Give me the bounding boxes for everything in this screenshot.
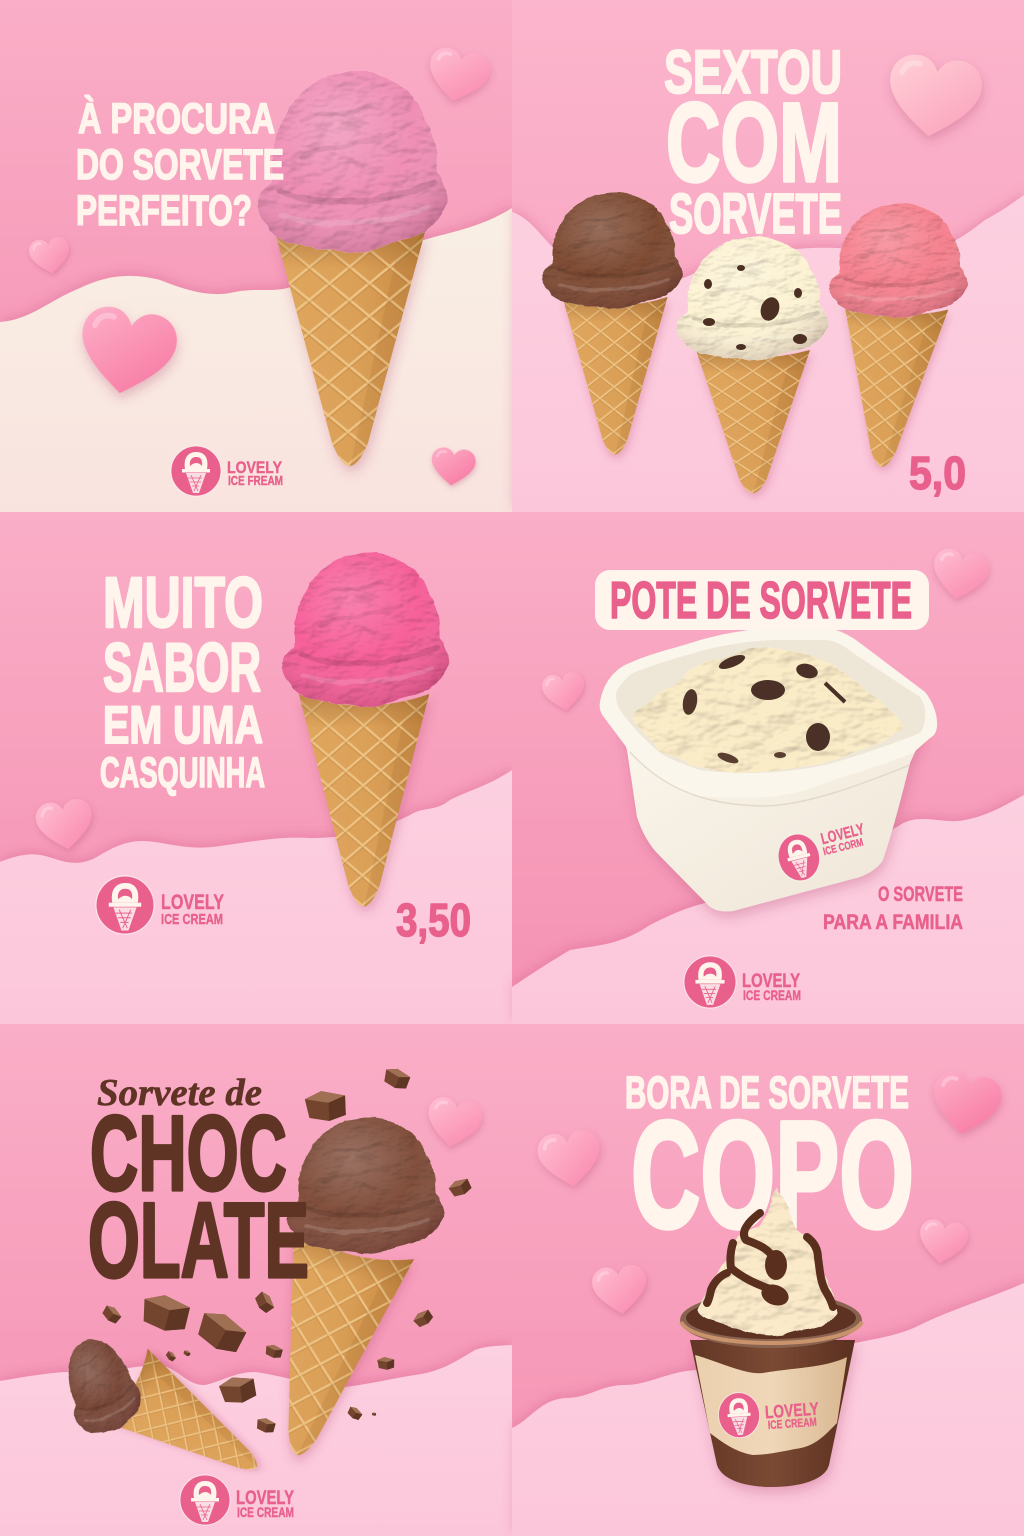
chocolate cone	[542, 192, 682, 455]
headline: DO SORVETE	[76, 141, 284, 189]
logo: ICE FREAM	[228, 473, 283, 488]
panel background	[0, 0, 512, 512]
logo	[171, 446, 283, 496]
logo	[684, 956, 801, 1008]
headline: SEXTOU	[664, 38, 842, 106]
chip vanilla cone	[677, 237, 827, 494]
headline	[625, 1067, 914, 1260]
panel: muito sabor em uma casquinha	[0, 512, 512, 1024]
headline	[88, 1093, 309, 1300]
panel background	[512, 0, 1024, 512]
pink scoop	[282, 552, 448, 707]
panel background	[512, 1024, 1024, 1536]
price: 5,0	[909, 447, 966, 499]
glass rim	[680, 1292, 862, 1348]
headline	[664, 38, 842, 246]
ice cream tub	[600, 628, 937, 912]
cup logo: ICE CREAM	[767, 1415, 817, 1432]
light wave	[0, 1345, 512, 1536]
icon: heart left	[541, 671, 587, 713]
headline: MUITO	[103, 564, 263, 643]
headline: CASQUINHA	[100, 749, 265, 797]
panel: bora de sorvete copo	[512, 1024, 1024, 1536]
headline: COM	[666, 80, 842, 205]
headline: CHOC	[90, 1093, 287, 1213]
tub logo: ICE CORM	[822, 837, 865, 858]
waffle cone	[299, 694, 429, 908]
headline: OLATE	[88, 1180, 309, 1300]
tagline	[823, 883, 963, 934]
icon: heart	[883, 51, 985, 143]
headline: EM UMA	[103, 696, 263, 755]
tub front rim line	[630, 752, 910, 806]
tub logo	[773, 818, 873, 885]
icon: heart left	[28, 236, 72, 276]
chocolate chunks	[100, 1066, 473, 1434]
cup body	[690, 1340, 855, 1487]
icon: heart right	[916, 1218, 970, 1266]
light wave	[0, 770, 512, 1024]
logo	[180, 1475, 294, 1525]
tagline: PARA A FAMILIA	[823, 911, 963, 934]
waffle cone	[275, 232, 425, 467]
chip ice cream scoop	[633, 648, 903, 772]
script title: Sorvete de	[97, 1072, 262, 1114]
icon: heart top right	[927, 1069, 1005, 1139]
panel: sextou com sorvete	[512, 0, 1024, 512]
icon: large heart	[73, 303, 181, 401]
logo: ICE CREAM	[237, 1504, 294, 1520]
icon: heart	[423, 1095, 485, 1151]
tub logo: LOVELY	[819, 821, 866, 848]
panel background	[512, 512, 1024, 1024]
headline	[76, 95, 284, 235]
icon: heart bottom right	[429, 446, 477, 488]
headline: PERFEITO?	[76, 187, 252, 235]
logo: LOVELY	[742, 971, 800, 992]
logo: ICE CREAM	[161, 911, 223, 928]
icon: heart top right	[929, 546, 991, 604]
panel: à procura do sorvete perfeito	[0, 0, 512, 512]
logo: LOVELY	[227, 458, 283, 477]
price: 3,50	[396, 894, 471, 946]
cream wave	[0, 208, 512, 512]
pink scoop	[258, 71, 446, 252]
logo: ICE CREAM	[743, 987, 801, 1003]
panel: sorvete de chocolate	[0, 1024, 512, 1536]
logo	[96, 876, 224, 934]
soft serve swirl	[697, 1187, 836, 1335]
panel: pote de sorvete	[512, 512, 1024, 1024]
light wave	[512, 195, 1024, 512]
headline: SORVETE	[669, 182, 842, 246]
main cone	[237, 1118, 443, 1472]
dessert cup	[680, 1187, 862, 1487]
panel background	[0, 512, 512, 1024]
cup middle layer	[695, 1355, 847, 1455]
icon: heart lower left	[591, 1264, 649, 1316]
cup logo	[717, 1387, 820, 1439]
logo: LOVELY	[161, 891, 224, 914]
light wave	[512, 1283, 1024, 1536]
light wave	[512, 795, 1024, 1024]
cup logo: LOVELY	[764, 1399, 820, 1422]
icon: heart left	[536, 1128, 604, 1190]
fallen small cone	[51, 1329, 280, 1504]
strawberry cone	[829, 203, 967, 472]
logo: LOVELY	[236, 1488, 294, 1509]
panel background	[0, 1024, 512, 1536]
icon: heart top right	[423, 45, 493, 107]
icon: heart	[34, 797, 96, 853]
headline: À PROCURA	[78, 95, 275, 143]
headline: SABOR	[103, 629, 261, 706]
tagline: O SORVETE	[878, 883, 963, 906]
headline	[100, 564, 265, 797]
